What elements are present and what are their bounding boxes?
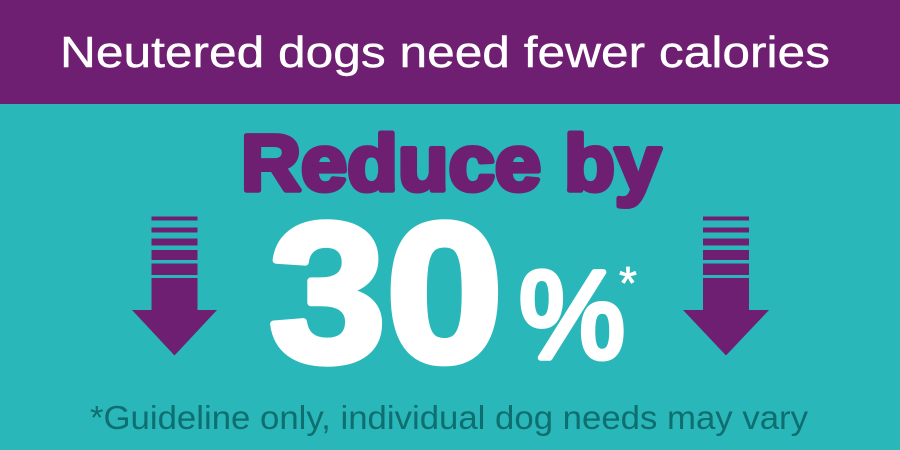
header banner [0,0,900,104]
icon: right down arrow [683,216,769,356]
footnote: *Guideline only, individual dog needs may vary [90,399,809,436]
icon: left down arrow [132,216,217,356]
title: Neutered dogs need fewer calories [60,28,830,77]
big number: 30%: 30 [269,182,503,403]
big number: 30% [269,182,637,403]
big number: 30%: * [619,257,637,309]
big number: 30%: % [519,247,625,385]
heading: reduce by: Reduce by [241,118,661,207]
